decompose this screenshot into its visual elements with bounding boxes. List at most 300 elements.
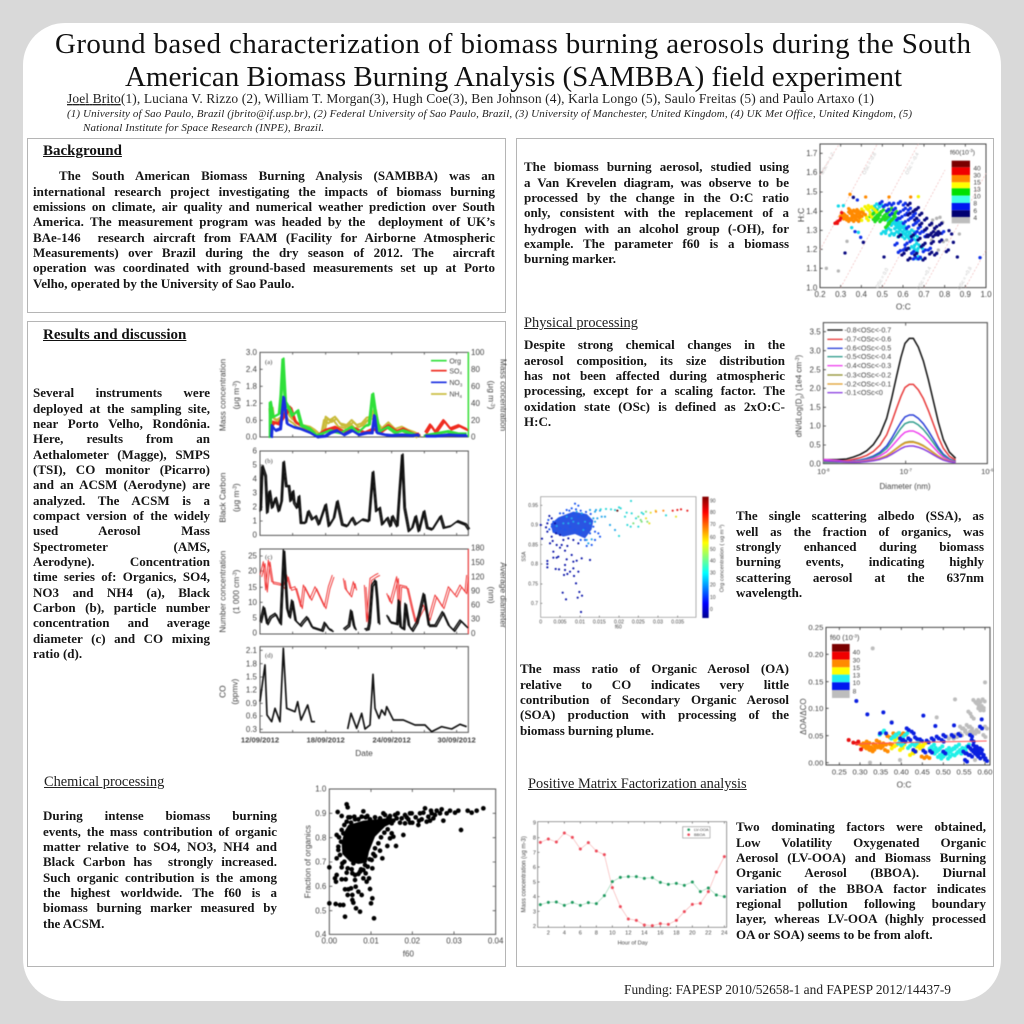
chart: PMF diurnal profile: 10: [609, 930, 615, 936]
chart: van krevelen diagram: 0.9: [960, 290, 971, 299]
chart: PMF diurnal profile: 5: [533, 880, 536, 886]
chart: SSA vs f60: 50: [710, 547, 716, 553]
text: background: [33, 168, 495, 291]
chart: fraction of organics vs f60: 0.9: [315, 809, 327, 818]
panel b: black carbon: [218, 447, 470, 540]
panel b: black carbon: 4: [253, 475, 258, 484]
chart: size distribution: 2.0: [810, 384, 821, 393]
panel a: mass concentration: 60: [471, 382, 480, 391]
chart: OA/CO vs O:C: 15: [853, 665, 860, 672]
panel a: mass concentration: -3: [489, 402, 495, 407]
chart: van krevelen diagram: 10: [973, 193, 981, 200]
chart: PMF diurnal profile: 6: [533, 865, 536, 871]
text: chemical processing: events, the mass contribution of organic: [43, 824, 277, 839]
text: instruments: diameter (c) and CO mixing: [33, 631, 210, 646]
chart: OA/CO vs O:C: 0.50: [936, 768, 951, 777]
panel a: mass concentration: Mass concentration: [218, 359, 228, 431]
chart: size distribution: -3: [795, 357, 801, 362]
panel c: number concentration and average diameter: [218, 543, 508, 638]
text: chemical processing: Such organic contribution is the among: [43, 870, 277, 885]
panel d: CO: 12/09/2012: [241, 735, 279, 744]
chart: van krevelen diagram: 1.2: [806, 245, 818, 254]
chart: van krevelen diagram: 6: [973, 208, 977, 215]
chart: PMF diurnal profile: 24: [721, 930, 727, 936]
text: instruments: used Aerosol Mass: [33, 523, 210, 538]
chart: size distribution: -6: [990, 467, 994, 472]
chart: van krevelen diagram: 0.7: [918, 290, 930, 299]
chart: size distribution: -0.6<OSc<-0.5: [844, 345, 891, 353]
text: physical processing: has not been affected during atmospheric: [524, 368, 785, 383]
panel a: mass concentration: 3.0: [246, 348, 258, 357]
chart: PMF diurnal profile: 22: [705, 930, 711, 936]
text: van krevelen: burning marker.: [524, 251, 616, 266]
text: van krevelen: a Van Krevelen diagram, was observe to be: [524, 175, 789, 190]
text: chemical processing: the highest worldwide. The f60 is a: [43, 885, 277, 900]
panel b: black carbon: 2: [253, 503, 258, 512]
text: instruments: time series of: Organics, SO4,: [33, 569, 210, 584]
chart: van krevelen diagram: 0.3: [835, 290, 847, 299]
chart: van krevelen diagram: -3: [969, 148, 973, 153]
panel c: number concentration and average diameter: 15: [248, 583, 258, 592]
panel d: CO: 30/09/2012: [438, 735, 476, 744]
chart: SSA vs f60: f60: [615, 625, 622, 631]
chart: OA/CO vs O:C: 10: [853, 680, 860, 687]
text: physical processing: processing, except for a scaling factor. The: [524, 383, 785, 398]
chart: SSA vs f60: 0.9: [531, 523, 538, 529]
chart: van krevelen diagram: 4: [973, 215, 977, 222]
text: instruments: and an ACSM (Aerodyne) are: [33, 477, 210, 492]
chart: PMF diurnal profile: 20: [689, 930, 695, 936]
heading: positive matrix factorization: Positive Matrix Factorization analysis: [528, 776, 747, 792]
chart: SSA vs f60: 0.03: [653, 619, 663, 625]
chart: van krevelen diagram: 13: [973, 186, 981, 193]
chart: OA/CO vs O:C: 0.15: [808, 677, 823, 686]
chart: PMF diurnal profile: 6: [579, 930, 582, 936]
chart: size distribution: 0.5: [810, 441, 821, 450]
chart: PMF diurnal profile: 8: [533, 836, 536, 842]
chart: size distribution: 0.0: [810, 459, 821, 468]
chart: OA/CO vs O:C: 0.55: [957, 768, 971, 777]
chart: PMF diurnal profile: 4: [533, 895, 536, 901]
text: positive matrix factorization: Low Volatility Oxygenated Organic: [736, 835, 986, 850]
text: instruments: Aerodyne). Concentration: [33, 554, 210, 569]
panel c: number concentration and average diameter: 25: [248, 552, 258, 561]
panel a: mass concentration: Mass concentration: [498, 359, 508, 431]
chart: van krevelen diagram: 0.8: [939, 290, 951, 299]
chart: size distribution: 10: [981, 467, 990, 476]
panel a: mass concentration: Org: [449, 358, 461, 365]
panel a: mass concentration: NO: [449, 380, 460, 387]
text: single scattering albedo: burning events, indicating highly: [736, 554, 984, 569]
chart: size distribution: 3.5: [810, 327, 821, 336]
chart: OA/CO vs O:C: 40: [853, 649, 860, 656]
chart: van krevelen diagram: OSc = -0.4: [904, 152, 921, 176]
text: single scattering albedo: well as the fraction of organics, was: [736, 524, 984, 539]
chart: SSA vs f60: 0.95: [528, 503, 538, 509]
panel b: black carbon: 0: [253, 531, 258, 540]
chart: PMF diurnal profile: Hour of Day: [618, 941, 648, 947]
chart: SSA vs f60: 70: [710, 522, 716, 528]
chart: van krevelen diagram: 1.7: [806, 149, 818, 158]
chart: OA/CO vs O:C: 0.25: [808, 623, 823, 632]
chart: PMF diurnal profile: 12: [625, 930, 631, 936]
chart: van krevelen diagram: 1.6: [806, 168, 818, 177]
text: instruments: ratio (d).: [33, 646, 82, 661]
chart: van krevelen diagram: [796, 142, 992, 311]
panel c: number concentration and average diameter: 120: [471, 572, 485, 581]
chart: van krevelen diagram: OSc = -0.8: [861, 152, 878, 176]
chart: van krevelen diagram: OSc = +0.8: [957, 266, 974, 291]
text: single scattering albedo: scattering aerosol at the 637nm: [736, 570, 984, 585]
panel b: black carbon: 5: [253, 461, 258, 470]
panel a: mass concentration: ): [231, 380, 241, 383]
chart: SSA vs f60: 0.75: [528, 582, 538, 588]
panel a: mass concentration: [218, 348, 508, 442]
chart: fraction of organics vs f60: 0.01: [363, 936, 379, 945]
chart: size distribution: -0.5<OSc<-0.4: [844, 353, 891, 361]
chart: OA/CO vs O:C: 0.10: [808, 704, 823, 713]
panel: background: [27, 138, 506, 313]
chart: OA/CO vs O:C: 0.35: [873, 768, 888, 777]
text: positive matrix factorization: regional pollution following boundary: [736, 896, 986, 911]
chart: SSA vs f60: 40: [710, 559, 716, 565]
chart: van krevelen diagram: 0.4: [856, 290, 867, 299]
chart: SSA vs f60: 0.8: [531, 562, 538, 568]
chart: SSA vs f60: 0.7: [531, 601, 538, 607]
chart: van krevelen diagram: 0.2: [814, 290, 826, 299]
chart: SSA vs f60: 0.02: [614, 619, 624, 625]
panel: right column: [516, 138, 994, 967]
chart: OA/CO vs O:C: O:C: [897, 780, 911, 790]
chart: size distribution: -0.4<OSc<-0.3: [844, 362, 891, 370]
panel d: CO: 0.9: [246, 699, 258, 708]
chart: SSA vs f60: 0.005: [554, 619, 567, 625]
chart: van krevelen diagram: 1.1: [806, 264, 818, 273]
chart: SSA vs f60: [520, 496, 726, 631]
chart: OA/CO vs O:C: ): [857, 633, 859, 642]
chart: size distribution: -0.7<OSc<-0.6: [844, 336, 891, 344]
text: mass ratio: biomass burning plume.: [520, 723, 654, 738]
panel a: mass concentration: 0.0: [246, 433, 258, 442]
panel b: black carbon: 1: [253, 517, 258, 526]
chart: size distribution: 2.5: [810, 365, 821, 374]
chart: size distribution: Diameter (nm): [879, 482, 931, 491]
chart: PMF diurnal profile: BBOA: [694, 832, 705, 837]
chart: SSA vs f60: ): [719, 524, 725, 526]
text: instruments: near Porto Velho, Rondônia.: [33, 416, 210, 431]
panel c: number concentration and average diameter: -3: [232, 572, 238, 577]
text: instruments: concentration and average: [33, 615, 210, 630]
text: single scattering albedo: The single scattering albedo (SSA), as: [736, 508, 984, 523]
chart: OA/CO vs O:C: 8: [853, 688, 857, 695]
chart: van krevelen diagram: 0.6: [897, 290, 909, 299]
title: Ground based characterization of biomass burning aerosols during the South: [55, 28, 972, 60]
chart: OA/CO vs O:C: 0.25: [832, 768, 847, 777]
text: instruments: analyzed. The ACSM is a: [33, 493, 210, 508]
text: instruments: Here, results from an: [33, 431, 210, 446]
text: physical processing: H:C.: [524, 414, 551, 429]
chart: van krevelen diagram: OSc = 0.0: [875, 267, 890, 290]
funding note: Funding: FAPESP 2010/52658-1 and FAPESP 2012/14437-9: [624, 982, 951, 997]
chart: size distribution: 1.5: [810, 403, 821, 412]
affiliations: National Institute for Space Research (INPE), Brazil.: [82, 122, 324, 134]
chart: van krevelen diagram: O:C: [896, 301, 911, 311]
chart: SSA vs f60: 10: [710, 595, 716, 601]
chart: SSA vs f60: 80: [710, 510, 716, 516]
panel a: mass concentration: 80: [471, 365, 480, 374]
chart: van krevelen diagram: 15: [973, 180, 981, 187]
text: background: The South American Biomass Burning Analysis (SAMBBA) was an: [59, 168, 495, 183]
chart: OA/CO vs O:C: 0.40: [894, 768, 909, 777]
chart: OA/CO vs O:C: 0.30: [853, 768, 867, 777]
chart: SSA vs f60: 60: [710, 535, 716, 541]
chart: PMF diurnal profile: 2: [547, 930, 550, 936]
chart: PMF diurnal profile: 14: [641, 930, 647, 936]
poster header: [55, 28, 972, 134]
text: chemical processing: [43, 808, 277, 931]
text: positive matrix factorization: Organic Aerosol (BBOA). Diurnal: [736, 865, 986, 880]
panel c: number concentration and average diameter: 20: [248, 567, 258, 576]
text: mass ratio: contribution of Secondary Organic Aerosol: [520, 692, 789, 707]
chart: fraction of organics vs f60: 0.04: [488, 936, 504, 945]
panel c: number concentration and average diameter: 0: [471, 629, 476, 638]
chart: van krevelen diagram: 1.0: [980, 290, 992, 299]
text: chemical processing: Black Carbon has strongly increased.: [43, 854, 277, 869]
panel a: mass concentration: NH: [449, 392, 459, 399]
title: American Biomass Burning Analysis (SAMBBA) field experiment: [125, 61, 902, 93]
text: background: Velho, operated by the University of Sao Paulo.: [33, 276, 294, 291]
text: background: BAe-146 research aircraft from FAAM (Facility for Airborne Atmospheric: [33, 230, 495, 245]
chart: van krevelen diagram: OSc = -1.2: [819, 152, 836, 176]
chart: fraction of organics vs f60: 0.00: [322, 936, 338, 945]
chart: OA/CO vs O:C: 0.60: [978, 768, 992, 777]
panel b: black carbon: 3: [253, 489, 258, 498]
chart: size distribution: -7: [908, 467, 912, 472]
panel a: mass concentration: 1.8: [246, 382, 258, 391]
text: positive matrix factorization: Two dominating factors were obtained,: [736, 819, 986, 834]
panel a: mass concentration: SO: [449, 368, 459, 375]
text: single scattering albedo: wavelength.: [736, 585, 802, 600]
chart: size distribution: ) (1e4 cm: [795, 362, 804, 396]
chart: SSA vs f60: 20: [710, 583, 716, 589]
chart: time series a-d: [218, 348, 508, 758]
text: instruments: [33, 385, 210, 661]
chart: SSA vs f60: 0: [710, 607, 713, 613]
panel c: number concentration and average diameter: 150: [471, 558, 485, 567]
chart: fraction of organics vs f60: 0.4: [315, 930, 327, 939]
panel a: mass concentration: 3: [460, 382, 463, 387]
text: mass ratio: The mass ratio of Organic Aerosol (OA): [520, 661, 789, 676]
panel c: number concentration and average diameter: Average diameter: [498, 562, 508, 628]
chart: PMF diurnal profile: [520, 820, 728, 947]
text: physical processing: oxidation state (OSc) is defined as 2xO:C-: [524, 399, 785, 414]
chart: PMF diurnal profile: 9: [533, 821, 536, 827]
chart: size distribution: [794, 321, 994, 491]
chart: size distribution: 10: [899, 467, 908, 476]
chart: PMF diurnal profile: Mass concentration (ug m-3): [521, 836, 527, 913]
panel b: black carbon: -3: [232, 486, 238, 491]
chart: van krevelen diagram: OSc = +0.4: [916, 266, 933, 291]
chart: OA/CO vs O:C: ΔOA/ΔCO: [799, 698, 808, 735]
chart: fraction of organics vs f60: 0.7: [315, 858, 327, 867]
panel b: black carbon: (b): [265, 458, 273, 465]
text: van krevelen: The biomass burning aerosol, studied using: [524, 159, 789, 174]
chart: size distribution: -0.8<OSc<-0.7: [844, 326, 891, 334]
chart: OA/CO vs O:C: 0.05: [808, 731, 823, 740]
chart: OA/CO vs O:C: 0.20: [808, 650, 823, 659]
chart: size distribution: -0.3<OSc<-0.2: [844, 371, 891, 379]
chart: size distribution: -0.2<OSc<-0.1: [844, 380, 891, 388]
text: background: America. The measurement program was headed by the deployment of UK’s: [33, 214, 495, 229]
chart: SSA vs f60: 0.01: [575, 619, 585, 625]
chart: SSA vs f60: 90: [710, 498, 716, 504]
affiliations: [67, 108, 912, 134]
panel c: number concentration and average diameter: (nm): [486, 586, 496, 604]
chart: OA/CO vs O:C: -3: [853, 634, 857, 639]
panel a: mass concentration: -3: [232, 383, 238, 388]
text: physical processing: [524, 337, 785, 429]
chart: van krevelen diagram: ): [973, 149, 975, 156]
chart: PMF diurnal profile: 3: [533, 909, 536, 915]
panel a: mass concentration: (μg m: [486, 381, 496, 402]
chart: van krevelen diagram: 1.4: [806, 207, 818, 216]
chart: van krevelen diagram: 8: [973, 201, 977, 208]
chart: SSA vs f60: 0.025: [632, 619, 645, 625]
chart: size distribution: -8: [826, 467, 830, 472]
panel c: number concentration and average diameter: 90: [471, 587, 480, 596]
chart: SSA vs f60: Org concentration ( ug m: [719, 530, 725, 592]
text: positive matrix factorization: [736, 819, 986, 942]
panel a: mass concentration: 20: [471, 416, 480, 425]
panel c: number concentration and average diameter: (1 000 cm: [231, 577, 241, 614]
panel a: mass concentration: (a): [265, 359, 272, 366]
chart: OA/CO vs O:C: 13: [853, 673, 860, 680]
chart: size distribution: ): [795, 354, 804, 357]
chart: SSA vs f60: 30: [710, 571, 716, 577]
panel a: mass concentration: 4: [459, 394, 462, 399]
chart: SSA vs f60: 0.015: [593, 619, 606, 625]
panel c: number concentration and average diameter: 10: [248, 598, 258, 607]
chart: size distribution: -0.1<OSc<0: [844, 389, 883, 397]
panel a: mass concentration: 4: [459, 371, 462, 376]
panel b: black carbon: 6: [253, 447, 258, 456]
chart: OA/CO vs O:C: f60 (10: [830, 633, 853, 642]
chart: size distribution: p: [799, 396, 805, 399]
text: instruments: NO3 and NH4 (a), Black: [33, 585, 210, 600]
panel a: mass concentration: 2.4: [246, 365, 258, 374]
heading: background: Background: [43, 143, 122, 159]
text: instruments: compact version of the widely: [33, 508, 210, 523]
panel d: CO: (d): [265, 652, 273, 659]
text: van krevelen: example. The parameter f60 is a biomass: [524, 236, 789, 251]
text: van krevelen: hydrogen with an alcohol group (-OH), for: [524, 221, 789, 236]
chart: SSA vs f60: 0: [539, 619, 542, 625]
text: positive matrix factorization: layer, whereas LV-OOA (highly processed: [736, 911, 986, 926]
chart: OA/CO vs O:C: 30: [853, 657, 860, 664]
text: mass ratio: (SOA) production with processing of the: [520, 707, 789, 722]
text: van krevelen: [524, 159, 789, 266]
panel b: black carbon: Black Carbon: [218, 472, 228, 523]
panel b: black carbon: ): [231, 483, 241, 486]
text: background: operation was coordinated with ground-based measurements set up at Porto: [33, 260, 495, 275]
panel d: CO: 0.6: [246, 712, 258, 721]
text: instruments: (TSI), CO monitor (Picarro): [33, 462, 210, 477]
chart: fraction of organics vs f60: 0.5: [315, 906, 327, 915]
panel d: CO: 2.1: [246, 646, 258, 655]
panel c: number concentration and average diameter: 180: [471, 543, 485, 552]
panel c: number concentration and average diameter: 30: [471, 615, 480, 624]
text: positive matrix factorization: variation of the BBOA factor indicates: [736, 881, 986, 896]
panel c: number concentration and average diameter: Number concentration: [218, 550, 228, 633]
text: background: emissions on climate, air quality and numerical weather prediction over South: [33, 199, 495, 214]
chart: PMF diurnal profile: 2: [533, 924, 536, 930]
chart: PMF diurnal profile: 16: [657, 930, 663, 936]
panel a: mass concentration: ): [486, 407, 496, 410]
panel b: black carbon: (μg m: [231, 491, 241, 512]
chart: fraction of organics vs f60: f60: [403, 950, 414, 959]
title: [55, 28, 972, 93]
panel d: CO: CO: [218, 685, 228, 698]
text: single scattering albedo: strongly enhanced during biomass: [736, 539, 984, 554]
chart: fraction of organics vs f60: 0.6: [315, 882, 327, 891]
chart: fraction of organics vs f60: 0.02: [405, 936, 421, 945]
panel d: CO: [218, 646, 476, 758]
text: background: international research project investigating the impacts of biomass burning: [33, 184, 495, 199]
chart: SSA vs f60: SSA: [522, 551, 528, 562]
panel d: CO: (ppmv): [230, 678, 240, 705]
chart: van krevelen diagram: f60(10: [950, 149, 969, 156]
chart: size distribution: 10: [817, 467, 826, 476]
panel a: mass concentration: 0: [471, 433, 476, 442]
panel d: CO: 1.8: [246, 659, 258, 668]
panel c: number concentration and average diameter: 60: [471, 601, 480, 610]
heading: chemical processing: Chemical processing: [44, 774, 164, 790]
heading: physical processing: Physical processing: [524, 315, 638, 331]
panel d: CO: 1.2: [246, 686, 258, 695]
text: instruments: deployed at the sampling site,: [33, 401, 210, 416]
text: chemical processing: During intense biomass burning: [43, 808, 277, 823]
panel a: mass concentration: 0.6: [246, 416, 258, 425]
panel d: CO: 24/09/2012: [373, 735, 411, 744]
chart: OA/CO vs O:C: 0.00: [808, 758, 823, 767]
chart: van krevelen diagram: 0.5: [877, 290, 888, 299]
text: positive matrix factorization: OA or SOA) seems to be from aloft.: [736, 927, 933, 942]
text: physical processing: aerosol composition, its size distribution: [524, 353, 785, 368]
panel c: number concentration and average diameter: 0: [253, 629, 258, 638]
chart: fraction of organics vs f60: 1.0: [315, 785, 327, 794]
panel: results and discussion: [27, 321, 508, 967]
panel a: mass concentration: 40: [471, 399, 480, 408]
chart: van krevelen diagram: 1.3: [806, 226, 818, 235]
text: chemical processing: the ACSM.: [43, 916, 104, 931]
chart: fraction of organics vs f60: Fraction of organics: [302, 825, 312, 898]
text: instruments: Aethalometer (Magge), SMPS: [33, 447, 210, 462]
panel a: mass concentration: (μg m: [231, 388, 241, 409]
chart: van krevelen diagram: H:C: [796, 208, 806, 222]
chart: size distribution: 1.0: [810, 422, 821, 431]
chart: PMF diurnal profile: 8: [595, 930, 598, 936]
chart: PMF diurnal profile: 18: [673, 930, 679, 936]
chart: OA/CO vs O:C: 0.45: [915, 768, 930, 777]
chart: SSA vs f60: -3: [719, 526, 723, 530]
chart: PMF diurnal profile: LV-OOA: [694, 827, 709, 832]
panel d: CO: 1.5: [246, 673, 258, 682]
chart: size distribution: dN/dLog(D: [795, 399, 804, 437]
chart: PMF diurnal profile: 4: [563, 930, 566, 936]
chart: PMF diurnal profile: 7: [533, 850, 536, 856]
chart: fraction of organics vs f60: 0.8: [315, 833, 327, 842]
text: instruments: Spectrometer (AMS,: [33, 539, 210, 554]
